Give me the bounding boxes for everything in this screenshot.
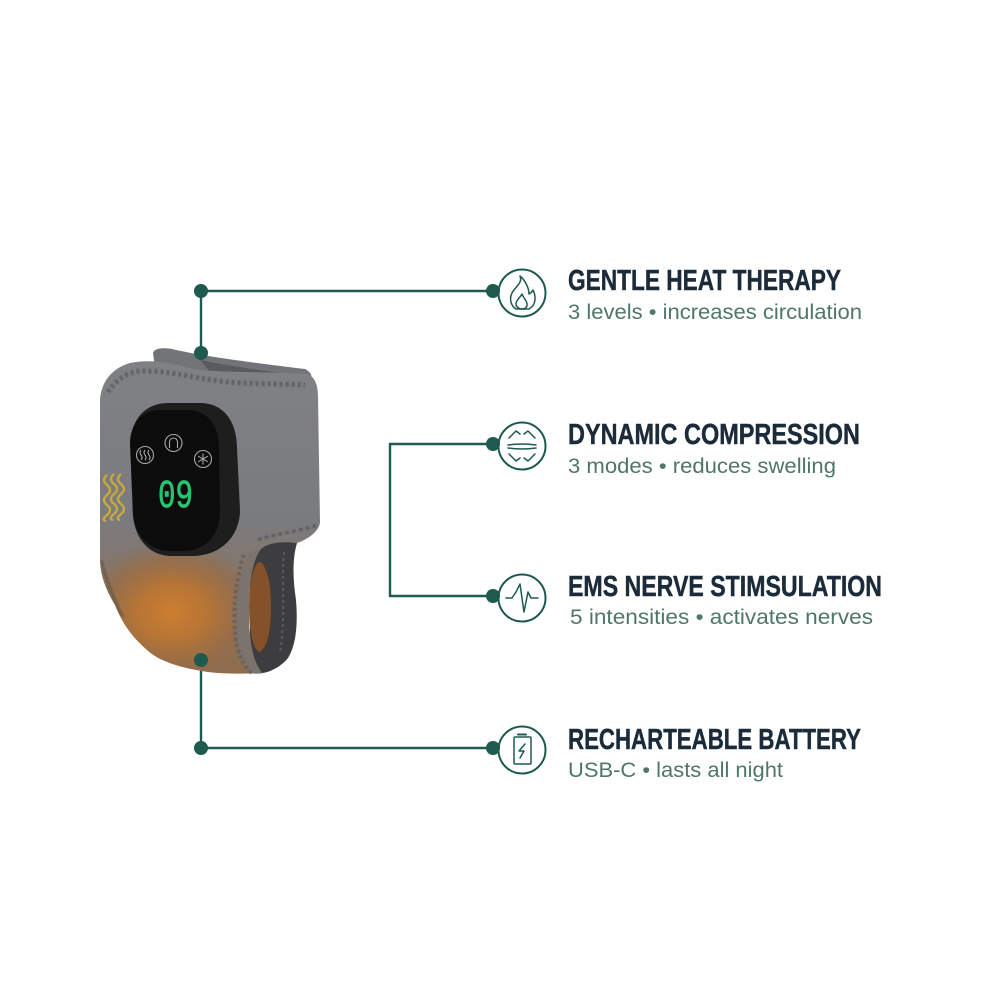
heading: DYNAMIC COMPRESSION: [568, 419, 860, 451]
feature: gentle heat therapy: [498, 265, 862, 324]
control panel shadow side: [131, 403, 240, 556]
panel icon: snow: [194, 450, 212, 468]
description: USB-C • lasts all night: [568, 758, 783, 782]
heat waves: [104, 474, 124, 521]
ring inner back band: [250, 541, 297, 674]
icon: battery: [498, 726, 546, 774]
stitching: [108, 371, 305, 392]
description: 3 modes • reduces swelling: [568, 454, 836, 478]
connector lines: [201, 291, 493, 748]
icon: pulse: [498, 574, 546, 622]
heading: RECHARTEABLE BATTERY: [568, 724, 861, 756]
ring side band: [234, 548, 262, 674]
panel icon: power: [165, 434, 182, 452]
heading: GENTLE HEAT THERAPY: [568, 265, 841, 297]
feature: rechargeable battery: [498, 724, 861, 782]
control panel face: [130, 410, 220, 551]
connector dots: [194, 284, 500, 755]
heading: EMS NERVE STIMSULATION: [568, 571, 882, 603]
heat glow: [102, 548, 250, 672]
description: 5 intensities • activates nerves: [570, 605, 873, 629]
feature: dynamic compression: [498, 419, 860, 478]
panel icon: heat: [136, 446, 154, 464]
icon: compression arrows: [498, 422, 546, 470]
main wrap body: [100, 361, 320, 674]
back strap: [153, 348, 312, 385]
product: heated knee massager: [100, 348, 320, 675]
feature: EMS nerve stimulation: [498, 571, 882, 629]
description: 3 levels • increases circulation: [568, 300, 862, 324]
icon: flame: [498, 270, 546, 316]
ring opening: [249, 562, 271, 652]
digital display: 09: [158, 475, 193, 520]
